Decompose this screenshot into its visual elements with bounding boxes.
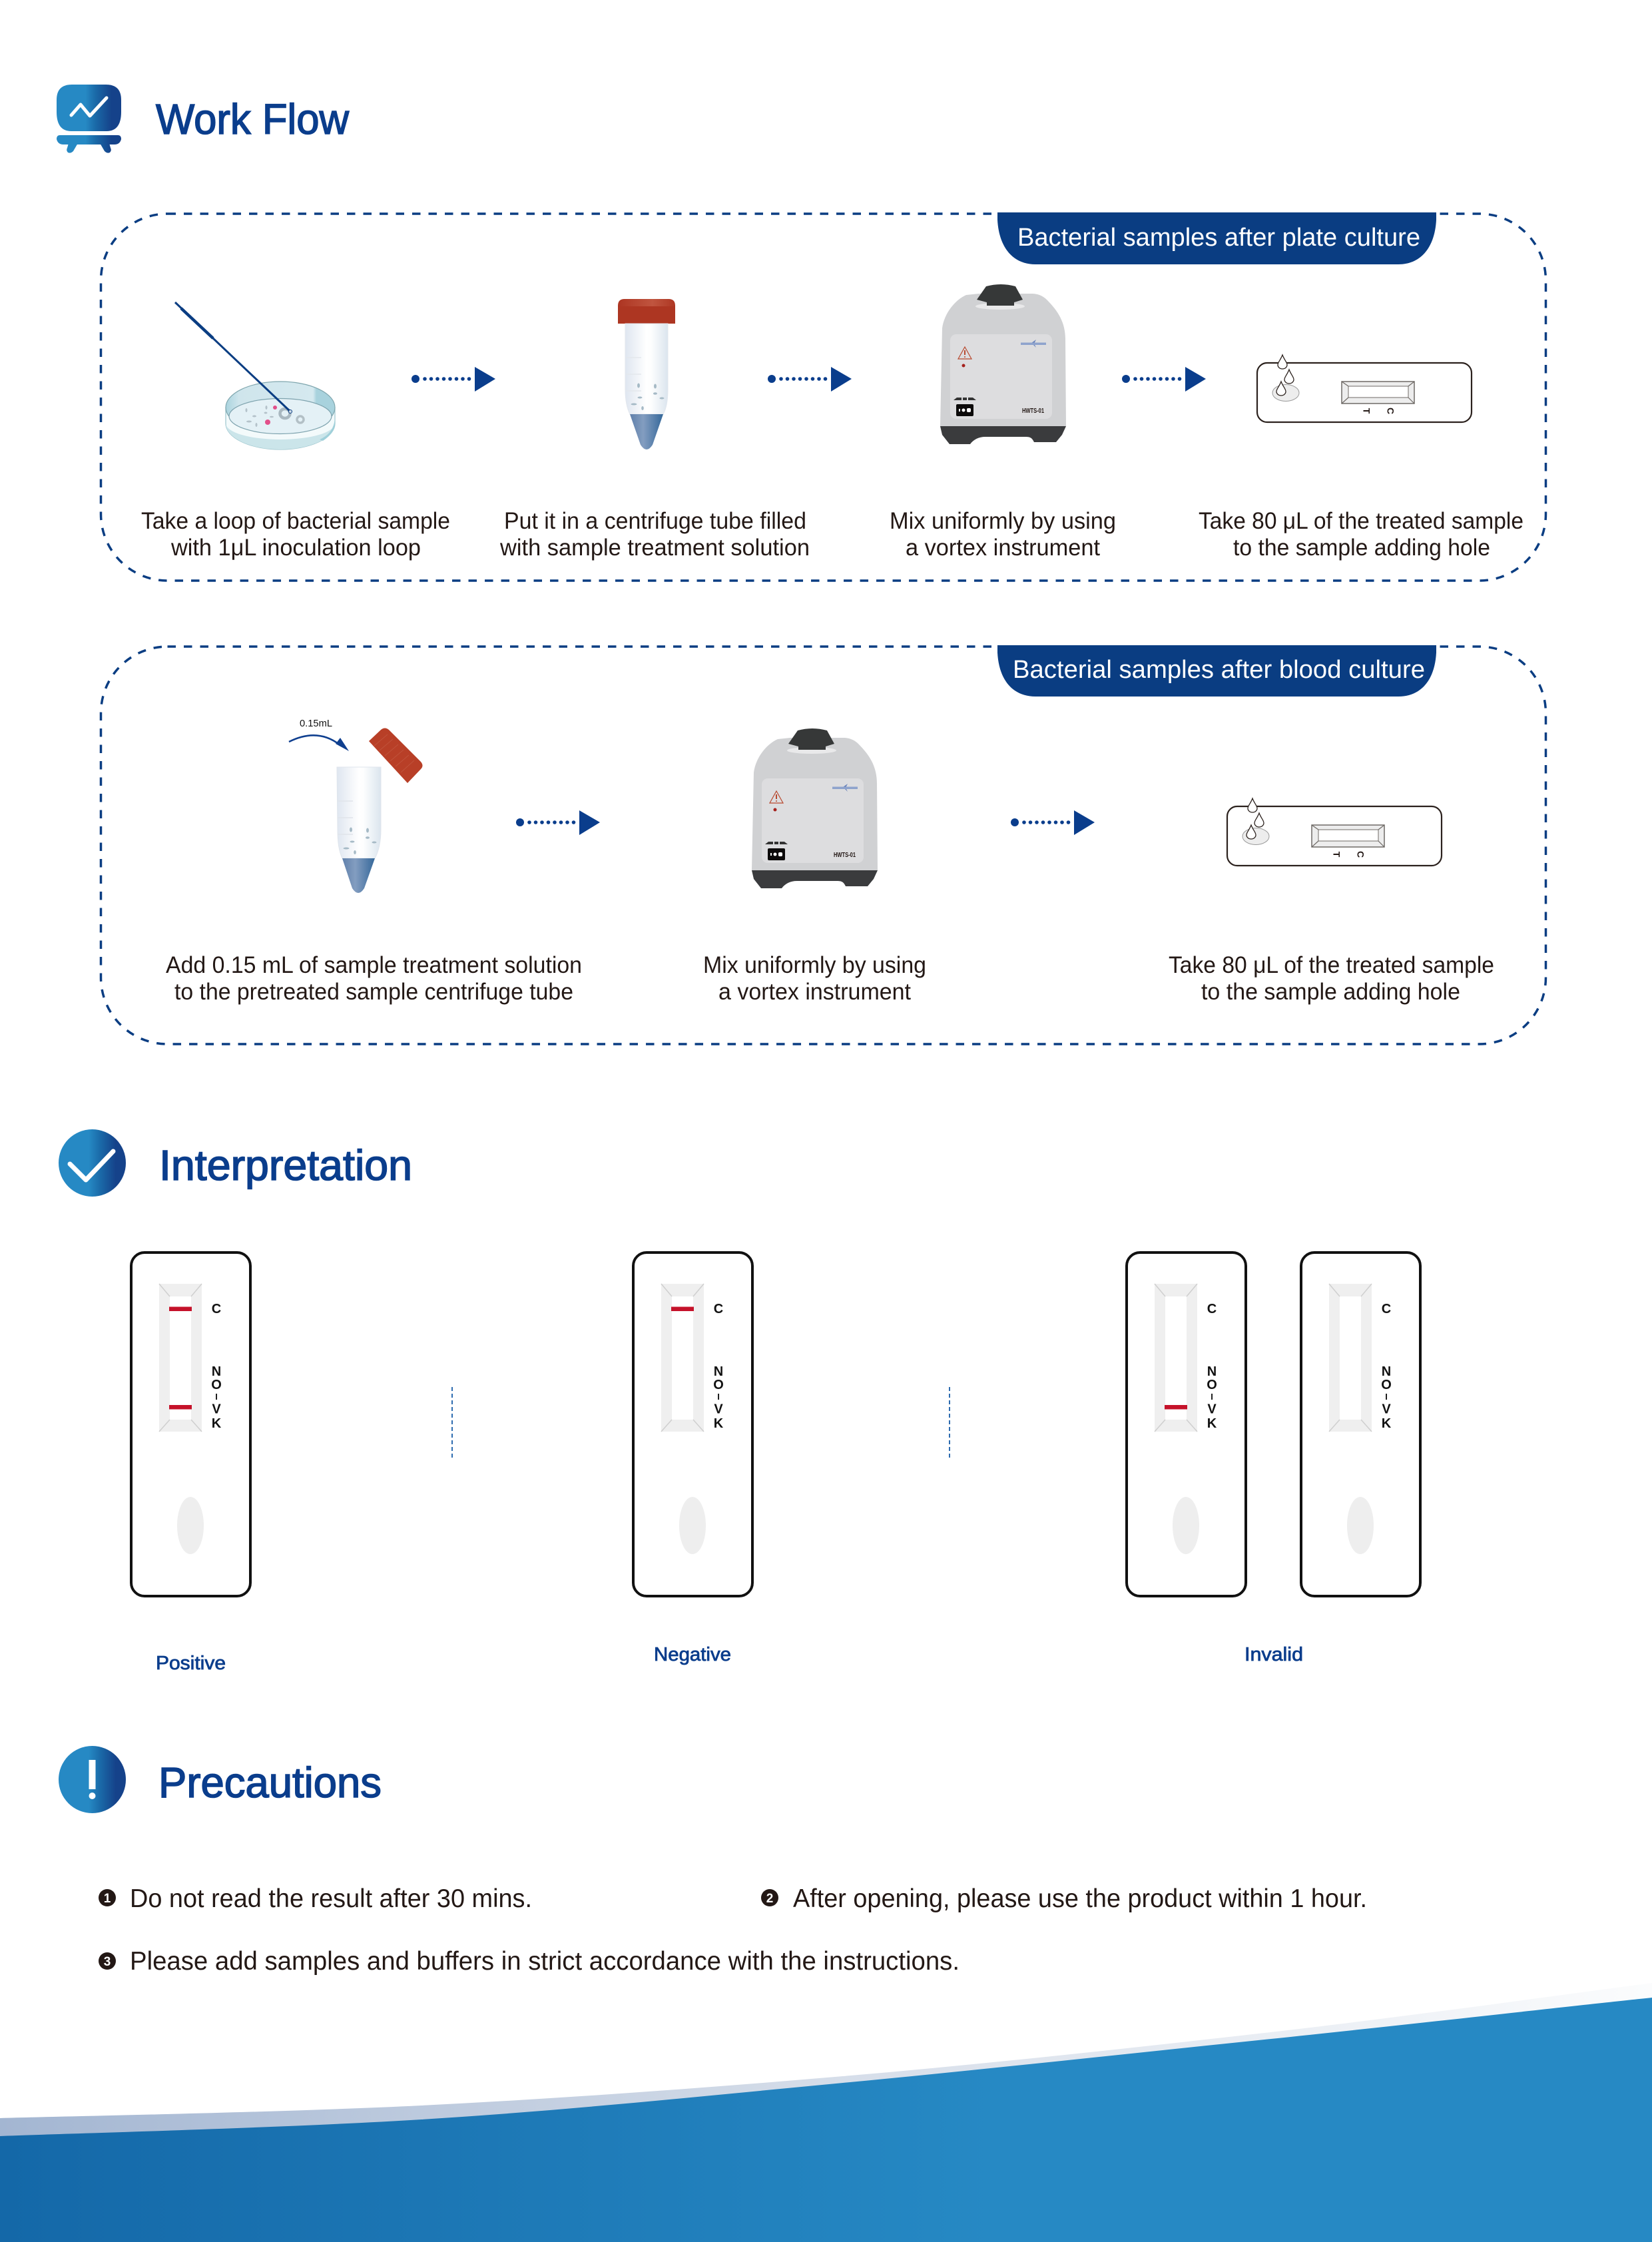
heading: Work Flow: Work Flow	[156, 95, 350, 143]
test card: invalid, test line only: C	[1207, 1302, 1217, 1316]
arrow: step 1 to 2	[412, 367, 495, 392]
text: step 2	[499, 508, 810, 561]
arrow: step 3 to 4	[1122, 367, 1206, 392]
divider	[949, 1387, 950, 1460]
label: positive: Positive	[156, 1653, 226, 1674]
panel: blood culture workflow	[101, 645, 1546, 1044]
icon: capped centrifuge tube	[618, 299, 675, 449]
test card: invalid, test line only	[1127, 1253, 1246, 1596]
text: blood step 3	[1169, 952, 1494, 1005]
precaution 1: Do not read the result after 30 mins.	[130, 1884, 532, 1913]
test card: positive: V	[212, 1402, 221, 1417]
text: step 3	[890, 508, 1116, 561]
text: blood step 2: Mix uniformly by using	[703, 952, 926, 978]
arrow: step 2 to 3	[768, 367, 852, 392]
label: negative: Negative	[654, 1644, 731, 1665]
test card: invalid, test line only: K	[1207, 1416, 1217, 1431]
panel: plate culture workflow	[101, 212, 1546, 581]
test card: invalid, no lines	[1301, 1253, 1420, 1596]
icon: exclamation	[59, 1746, 126, 1813]
icon: test cassette with sample drops: C	[1385, 408, 1396, 414]
test card: positive: I	[215, 1392, 218, 1402]
label: invalid: Invalid	[1244, 1644, 1303, 1665]
text: step 4	[1199, 508, 1523, 561]
text: blood step 3: to the sample adding hole	[1201, 979, 1460, 1005]
icon: open tube with 0.15 mL arrow: 0.15mL	[300, 718, 332, 729]
icon: vortex instrument	[752, 728, 878, 888]
icon: vortex instrument	[940, 284, 1066, 444]
test card: invalid, no lines: V	[1382, 1402, 1391, 1417]
test card: invalid, no lines: C	[1382, 1302, 1391, 1316]
label: blood culture: Bacterial samples after blood culture	[1013, 656, 1425, 684]
test card: invalid, no lines: K	[1382, 1416, 1392, 1431]
text: step 2: Put it in a centrifuge tube filled	[504, 508, 806, 534]
text: blood step 1: to the pretreated sample centrifuge tube	[174, 979, 573, 1005]
test card: positive: C	[212, 1302, 221, 1316]
label: blood culture	[997, 645, 1436, 697]
precaution 2: 2	[766, 1892, 773, 1906]
test card: invalid, no lines: I	[1385, 1392, 1388, 1402]
text: step 1	[141, 508, 450, 561]
footer wave	[0, 1983, 1652, 2242]
icon: vortex instrument: HWTS-01	[1022, 407, 1044, 415]
text: blood step 3: Take 80 μL of the treated sample	[1169, 952, 1494, 978]
text: blood step 2: a vortex instrument	[718, 979, 911, 1005]
test card: negative: C	[714, 1302, 723, 1316]
heading: Precautions: Precautions	[158, 1759, 382, 1807]
test card: positive: O	[211, 1378, 222, 1392]
icon: petri dish with inoculation loop	[175, 302, 335, 449]
test card: negative: I	[717, 1392, 720, 1402]
test card: positive: K	[212, 1416, 222, 1431]
test card: invalid, no lines: N	[1382, 1364, 1391, 1379]
label: plate culture: Bacterial samples after plate culture	[1017, 224, 1420, 252]
icon: presentation board	[57, 85, 121, 153]
test card: invalid, test line only: I	[1211, 1392, 1213, 1402]
test card: negative	[633, 1253, 752, 1596]
test card: invalid, test line only: V	[1207, 1402, 1217, 1417]
icon: test cassette with sample drops: C	[1355, 851, 1366, 858]
test card: positive	[131, 1253, 250, 1596]
icon: test cassette with sample drops: T	[1331, 852, 1342, 858]
arrow: blood step 2 to 3	[1011, 810, 1095, 835]
precaution 3: 3	[104, 1955, 111, 1969]
icon: test cassette with sample drops: T	[1361, 408, 1372, 414]
test card: negative: O	[713, 1378, 724, 1392]
text: step 1: with 1μL inoculation loop	[170, 535, 421, 561]
arrow: blood step 1 to 2	[516, 810, 600, 835]
text: step 4: to the sample adding hole	[1233, 535, 1490, 561]
text: blood step 1	[166, 952, 582, 1005]
test card: positive: N	[212, 1364, 221, 1379]
icon: test cassette with sample drops	[1257, 355, 1472, 422]
test card: invalid, no lines: O	[1381, 1378, 1392, 1392]
icon: open tube with 0.15 mL arrow	[289, 718, 422, 893]
precaution 2: After opening, please use the product within 1 hour.	[793, 1884, 1367, 1913]
precaution 3: Please add samples and buffers in strict accordance with the instructions.	[130, 1947, 960, 1976]
text: step 2: with sample treatment solution	[499, 535, 810, 561]
text: blood step 1: Add 0.15 mL of sample treatment solution	[166, 952, 582, 978]
heading: Interpretation: Interpretation	[159, 1141, 412, 1189]
icon: test cassette with sample drops	[1227, 798, 1442, 866]
text: step 4: Take 80 μL of the treated sample	[1199, 508, 1523, 534]
text: step 3: Mix uniformly by using	[890, 508, 1116, 534]
text: blood step 2	[703, 952, 926, 1005]
divider	[451, 1387, 453, 1460]
test card: negative: K	[714, 1416, 724, 1431]
test card: negative: V	[714, 1402, 723, 1417]
test card: invalid, test line only: N	[1207, 1364, 1217, 1379]
precaution 1: 1	[104, 1892, 111, 1906]
text: step 3: a vortex instrument	[906, 535, 1100, 561]
test card: invalid, test line only: O	[1207, 1378, 1217, 1392]
label: plate culture	[997, 212, 1436, 264]
text: step 1: Take a loop of bacterial sample	[141, 508, 450, 534]
icon: check mark	[59, 1129, 126, 1197]
test card: negative: N	[714, 1364, 723, 1379]
icon: vortex instrument: HWTS-01	[834, 851, 856, 859]
